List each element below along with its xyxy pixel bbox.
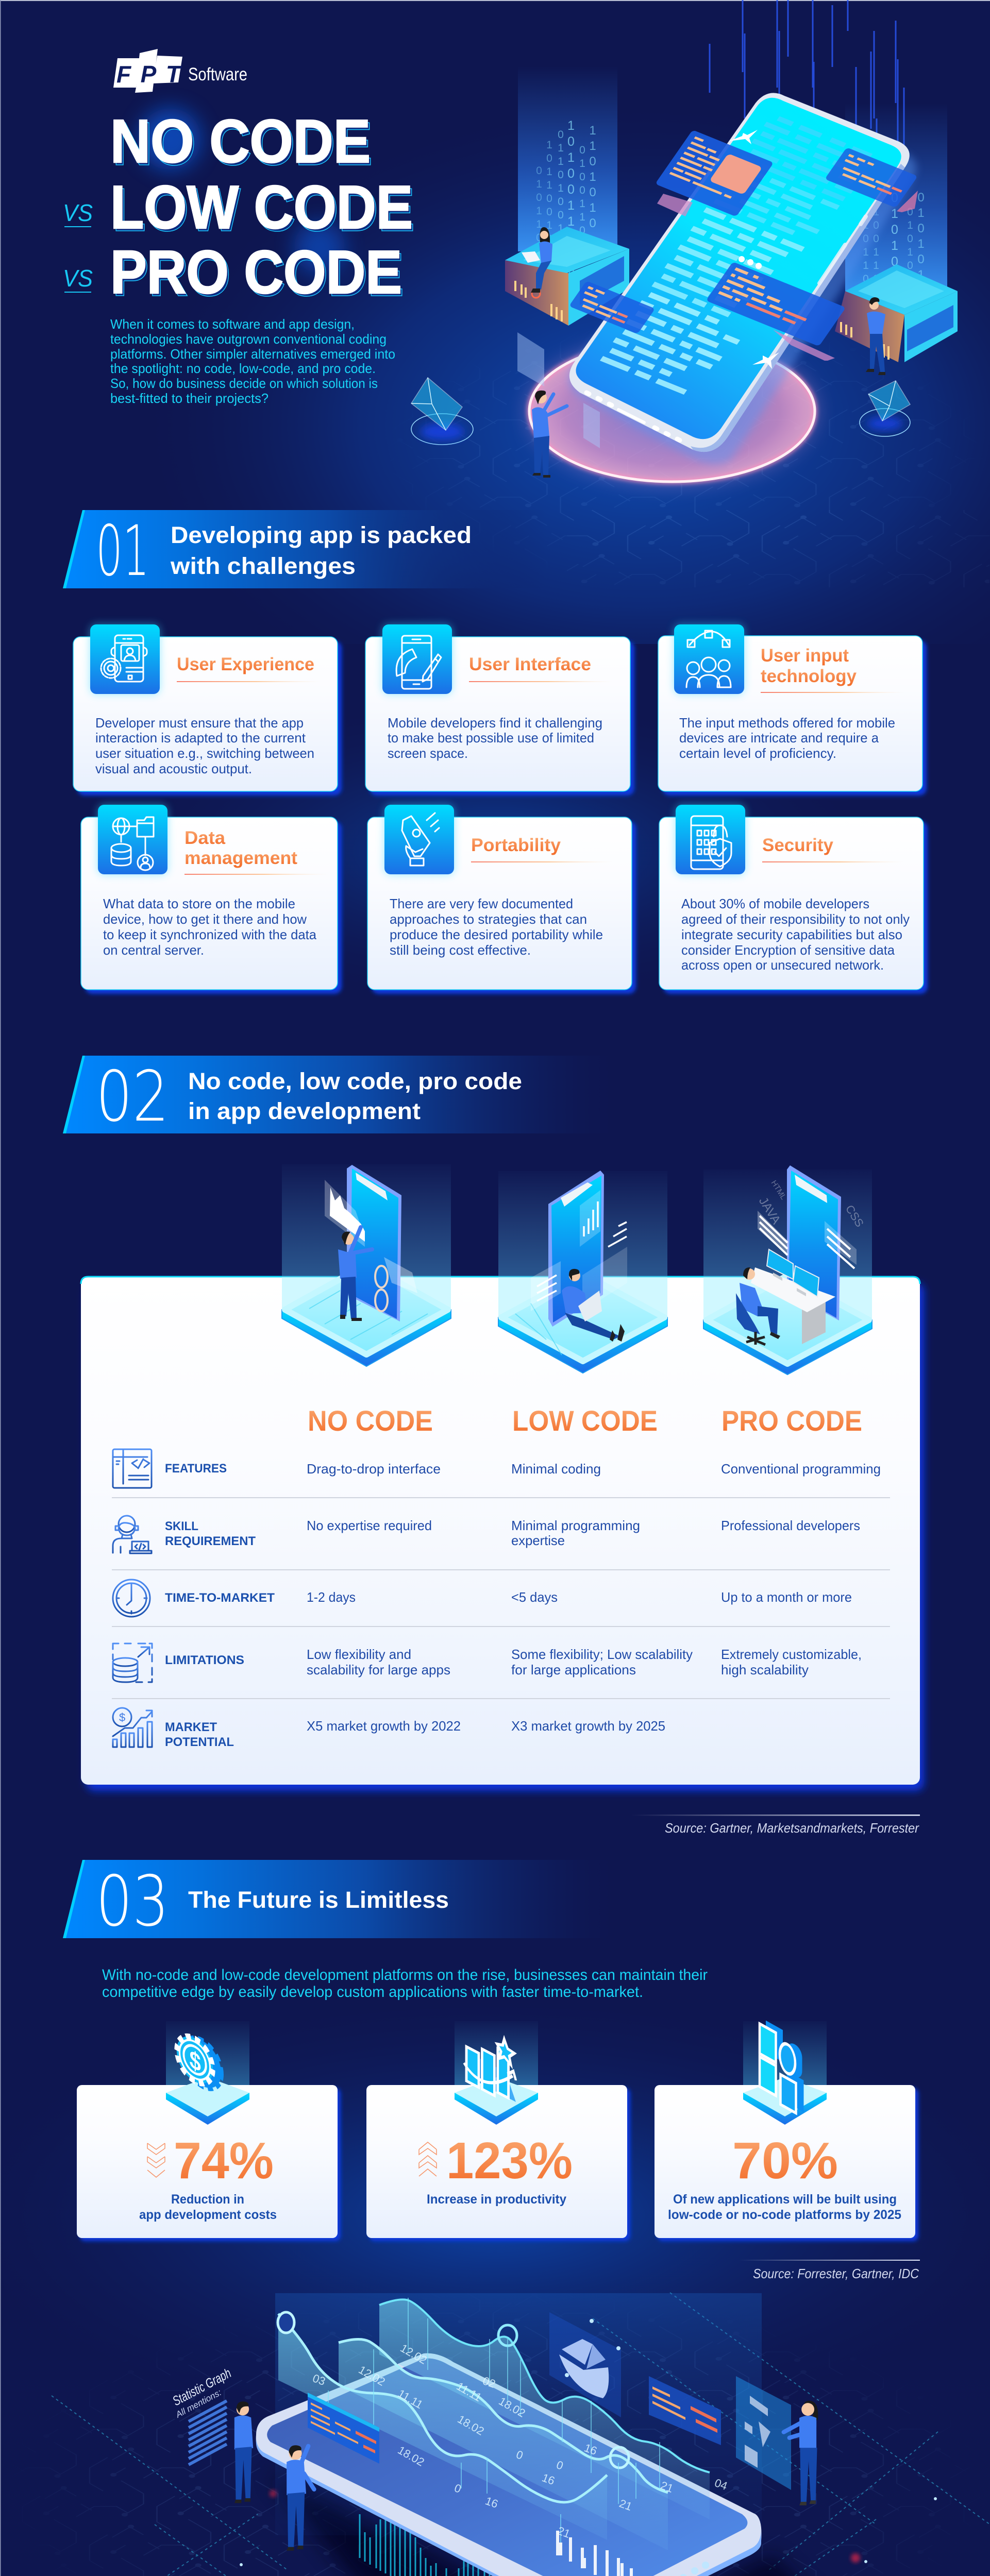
chart axis labels: 16 [582, 2441, 599, 2458]
body text: agreed of their responsibility to not only [681, 911, 910, 927]
heading 01: Developing app is packed [171, 522, 472, 548]
row: skill requirement [113, 1516, 860, 1553]
title: technology [761, 666, 857, 686]
hero illustration: giant phone with code [381, 0, 990, 587]
stat label [139, 2192, 277, 2222]
heading line: NO CODE: NO CODE [112, 110, 373, 178]
chart axis labels: 11.11 [396, 2387, 425, 2411]
label: SKILL [165, 1519, 198, 1533]
pie chart panel [549, 2312, 621, 2417]
body text: consider Encryption of sensitive data [681, 942, 895, 958]
body text: Developer must ensure that the app [95, 715, 304, 731]
body text: across open or unsecured network. [681, 957, 884, 973]
label: vs: VS [63, 199, 93, 226]
glowing ring platform [529, 340, 815, 482]
binary digits: left: 1101010 [585, 124, 600, 232]
icon: developer with laptop [113, 1516, 152, 1553]
stat card: 70 percent [655, 2017, 918, 2241]
values: Extremely customizable, [721, 1647, 862, 1662]
chart axis labels: 18.02 [456, 2413, 486, 2438]
icon: keypad phone with shield [691, 816, 731, 869]
chart axis labels: 18.02 [497, 2395, 528, 2420]
values: X3 market growth by 2025 [511, 1718, 665, 1734]
section header 02 [63, 1056, 613, 1137]
phone base [256, 2353, 762, 2576]
values: Up to a month or more [721, 1589, 852, 1605]
binary digits: right: 010101 [914, 191, 928, 283]
label: MARKET [165, 1720, 217, 1734]
body text: interaction is adapted to the current [95, 730, 306, 745]
heading 02: No code, low code, pro code [188, 1068, 522, 1094]
title: Security [762, 835, 834, 855]
brand logo: FPT Software: Software [188, 64, 247, 84]
heading 02: in app development [188, 1098, 421, 1124]
row: time to market [113, 1580, 852, 1617]
intro paragraph: platforms. Other simpler alternatives emerged into [110, 346, 395, 362]
heading 03: The Future is Limitless [188, 1887, 449, 1913]
body text: visual and acoustic output. [95, 761, 252, 776]
language labels: CSS [843, 1202, 866, 1229]
heading line: NO CODE: NO CODE [110, 107, 371, 176]
cube: right [860, 381, 910, 436]
code panel: top right [825, 147, 918, 208]
body text: to keep it synchronized with the data [103, 927, 317, 942]
values [307, 1647, 862, 1677]
statistic graph label: All mentions: [174, 2387, 223, 2420]
chart axis labels: 18.02 [396, 2444, 427, 2469]
holo pages [517, 332, 600, 448]
icon: code window [113, 1449, 152, 1488]
person: programmer in chair [736, 1267, 780, 1345]
code panel: right [649, 2376, 721, 2445]
illustration: pro code platform [703, 1165, 872, 1375]
light beam: right [845, 103, 947, 294]
heading line: LOW CODE: LOW CODE [110, 173, 413, 242]
source note: section 3: Source: Forrester, Gartner, IDC [753, 2266, 919, 2281]
body text [679, 715, 895, 761]
body text: The input methods offered for mobile [679, 715, 895, 731]
binary digits: left: 01001101 [576, 144, 589, 251]
person: man pointing up [287, 2445, 314, 2551]
chart axis labels: 02 [481, 2374, 497, 2391]
phone home button [618, 410, 644, 422]
chart axis labels: 21 [556, 2524, 572, 2540]
person: pushing at phone [338, 1227, 372, 1321]
values: Some flexibility; Low scalability [511, 1647, 693, 1662]
label: LIMITATIONS [165, 1653, 244, 1667]
title: User input [761, 646, 849, 666]
values: Low flexibility and [307, 1647, 411, 1662]
values [307, 1718, 665, 1734]
icon: phone with gear [101, 635, 147, 682]
stat value: 70% [732, 2132, 838, 2190]
stat value: 74% [174, 2132, 274, 2190]
body text: produce the desired portability while [390, 927, 603, 942]
light beam: left [518, 66, 617, 251]
language labels [756, 1179, 866, 1229]
icon: hand holding phone with signal [402, 813, 439, 866]
card: portability [367, 805, 636, 994]
language labels: JAVA [756, 1195, 783, 1227]
body text [95, 715, 314, 776]
illustration: analytics phone with charts [0, 2287, 990, 2576]
heading line: PRO CODE: PRO CODE [112, 241, 404, 309]
chart axis labels: 03 [311, 2371, 327, 2388]
icon: globe, folder, database, user [111, 817, 154, 870]
body text [681, 896, 910, 973]
chart axis labels: 04 [713, 2476, 729, 2493]
values: Drag-to-drop interface [307, 1461, 441, 1477]
row: features [113, 1449, 881, 1488]
intro paragraph [110, 316, 395, 406]
body text: on central server. [103, 942, 204, 958]
chart axis labels: 12.02 [398, 2342, 429, 2367]
body text: screen space. [388, 745, 468, 761]
illustration: low code platform [498, 1171, 667, 1373]
row: limitations [113, 1643, 862, 1682]
circuit floor [461, 379, 915, 551]
chart axis labels: 0 [555, 2458, 565, 2472]
chart axis labels: 21 [617, 2497, 634, 2513]
body text [103, 896, 317, 958]
code panel: lower left [569, 281, 655, 334]
binary digits: left: 1010011010 [564, 118, 578, 278]
stat label: low-code or no-code platforms by 2025 [668, 2208, 901, 2222]
stat label: Increase in productivity [427, 2192, 566, 2207]
values: X5 market growth by 2022 [307, 1718, 461, 1734]
binary digits: left [533, 118, 600, 278]
panel: comparison table [81, 1164, 924, 1791]
binary digits: left: 011010010 [555, 129, 567, 249]
intro paragraph: When it comes to software and app design, [110, 316, 355, 332]
circuit background [74, 2330, 913, 2576]
body text: integrate security capabilities but also [681, 927, 902, 942]
flow chart panel [736, 2376, 791, 2490]
body text: What data to store on the mobile [103, 896, 295, 911]
values: Professional developers [721, 1518, 860, 1533]
label [165, 1519, 256, 1548]
card: user experience [73, 624, 342, 795]
values: 1-2 days [307, 1589, 356, 1605]
label: POTENTIAL [165, 1735, 234, 1749]
values: scalability for large apps [307, 1662, 450, 1677]
section 3 intro text [102, 1967, 708, 2001]
chart axis labels [311, 2342, 729, 2540]
source note: section 2: Source: Gartner, Marketsandmarkets, Forrester [665, 1820, 919, 1836]
title [184, 828, 329, 875]
values: expertise [511, 1533, 565, 1548]
number 03: 03 [96, 1861, 169, 1942]
body text: About 30% of mobile developers [681, 896, 869, 911]
person: man pointing at phone [532, 391, 567, 478]
body text: to make best possible use of limited [388, 730, 594, 745]
body text: certain level of proficiency. [679, 745, 836, 761]
label: vs second: VS [63, 265, 93, 292]
body text: approaches to strategies that can [390, 911, 587, 927]
card: user input technology [658, 624, 927, 795]
card: user interface [365, 624, 634, 795]
floating pink slabs [657, 191, 918, 361]
person: man with hand on chin [234, 2401, 253, 2503]
home dots [670, 2565, 706, 2576]
sparkle [729, 130, 779, 369]
values: high scalability [721, 1662, 809, 1677]
data streaks [710, 0, 904, 165]
number 01: 01 [96, 511, 149, 591]
binary digits: left: 0101100 [533, 165, 545, 259]
values: Minimal programming [511, 1518, 640, 1533]
person: man thinking at right block [866, 297, 885, 375]
values: for large applications [511, 1662, 636, 1677]
section 3 intro text: With no-code and low-code development platforms on the rise, businesses can maintain their [102, 1967, 708, 1984]
code lines on screen [600, 113, 880, 404]
title: no code vs low code vs pro code [63, 107, 415, 309]
intro paragraph: best-fitted to their projects? [110, 391, 269, 406]
stat card: 74 percent [77, 2021, 341, 2241]
row: market potential [113, 1708, 665, 1749]
stat label: Of new applications will be built using [673, 2192, 897, 2207]
values [307, 1461, 881, 1477]
heading line: PRO CODE: PRO CODE [110, 238, 402, 307]
sparkles [195, 2319, 937, 2576]
section header 03 [63, 1860, 613, 1942]
column heading: low code: LOW CODE [512, 1404, 658, 1437]
card: data management [81, 805, 342, 994]
intro paragraph: technologies have outgrown conventional coding [110, 331, 387, 347]
chart axis labels: 11.11 [455, 2380, 484, 2404]
number 02: 02 [96, 1056, 169, 1137]
body text: Mobile developers find it challenging [388, 715, 602, 731]
binary digits: right: 0101100 [860, 206, 872, 300]
section 1 circuit backdrop [567, 510, 989, 587]
chart axis labels: 16 [540, 2471, 557, 2487]
brand logo: FPT Software [113, 49, 247, 93]
stat card: 123 percent [366, 2018, 630, 2241]
binary digits: right: 100110 [870, 206, 882, 286]
icon: people with checkboxes [686, 631, 731, 687]
column heading: no code: NO CODE [308, 1404, 433, 1437]
icon: clock [113, 1580, 150, 1617]
column heading: pro code: PRO CODE [721, 1404, 862, 1437]
hanging data bars [360, 2512, 498, 2576]
icon: growth chart: $ [119, 1711, 125, 1724]
icon: gear with dollar [177, 2027, 221, 2096]
icon: rising bars with star [464, 2018, 516, 2107]
icon: double down chevrons [147, 2143, 165, 2177]
window dots [742, 259, 759, 266]
binary digits: right: 0101011 [887, 191, 902, 302]
values: No expertise required [307, 1518, 432, 1533]
title: User Interface [469, 654, 591, 674]
values [307, 1518, 860, 1548]
language labels: HTML [769, 1179, 788, 1201]
chart axis labels: 16 [483, 2494, 500, 2511]
shadow under phone [268, 2473, 825, 2576]
back light panel [275, 2293, 762, 2535]
chart axis labels: 0 [452, 2481, 463, 2496]
icon: app blocks [760, 2017, 804, 2117]
code panel: center [706, 262, 846, 346]
heading 01: with challenges [170, 553, 356, 579]
intro paragraph: the spotlight: no code, low-code, and pro code. [110, 361, 376, 376]
title: management [184, 848, 297, 868]
chart axis labels: 12.02 [357, 2363, 388, 2388]
brand logo: FPT Software: FPT [116, 61, 182, 88]
values: Conventional programming [721, 1461, 881, 1477]
heading line: LOW CODE: LOW CODE [112, 176, 415, 244]
title [761, 646, 905, 693]
icon: scaling database [113, 1643, 152, 1682]
label: REQUIREMENT [165, 1534, 256, 1548]
section header 01 [63, 510, 546, 591]
stat value: 123% [446, 2132, 573, 2190]
label [165, 1720, 234, 1749]
heading 01 [170, 522, 472, 579]
heading 02 [188, 1068, 522, 1124]
phone body and screen [569, 93, 916, 464]
card: security [659, 805, 928, 994]
icon: gear with dollar: $ [190, 2044, 201, 2078]
body text: user situation e.g., switching between [95, 745, 314, 761]
binary digits: left: 10110010 [543, 139, 556, 246]
chart panel [278, 2298, 729, 2550]
icon: growth chart [113, 1708, 152, 1747]
body text: device, how to get it there and how [103, 911, 307, 927]
title: Portability [471, 835, 561, 855]
stat label: app development costs [139, 2208, 277, 2222]
binary digits: right [860, 191, 928, 302]
statistic graph label [170, 2365, 233, 2465]
server block: right [835, 264, 958, 362]
chart axis labels: 0 [514, 2448, 525, 2462]
values [307, 1589, 852, 1605]
person: woman with laptop [522, 227, 552, 293]
label: TIME-TO-MARKET [165, 1591, 275, 1605]
person: sitting with laptop [562, 1269, 625, 1342]
server block: left [505, 227, 629, 326]
binary digits: right: 01010 [904, 206, 916, 273]
values: Minimal coding [511, 1461, 601, 1477]
body text: devices are intricate and require a [679, 730, 879, 745]
body text: There are very few documented [390, 896, 573, 911]
icon: double up chevrons [419, 2142, 437, 2176]
values: <5 days [511, 1589, 558, 1605]
stat label: Reduction in [171, 2192, 244, 2207]
icon: phone with protractor and pencil [396, 636, 441, 689]
chart axis labels: 21 [659, 2479, 675, 2495]
body text: still being cost effective. [390, 942, 531, 958]
title: User Experience [177, 654, 314, 674]
intro paragraph: So, how do business decide on which solution is [110, 376, 378, 391]
code panel: top left [655, 130, 774, 217]
cube: left [411, 378, 473, 445]
dashed traces [52, 2293, 990, 2576]
stat label [668, 2192, 901, 2222]
statistic graph label: Statistic Graph [170, 2365, 233, 2409]
section 3 intro text: competitive edge by easily develop custom applications with faster time-to-market. [102, 1984, 643, 2001]
title: Data [184, 828, 226, 848]
label: FEATURES [165, 1462, 227, 1476]
code panel: left [308, 2393, 379, 2464]
white bars on phone [558, 2531, 631, 2576]
illustration: no code platform [282, 1164, 451, 1366]
body text [390, 896, 603, 958]
body text [388, 715, 602, 761]
person: woman at flow chart [784, 2401, 818, 2505]
desk with monitors [751, 1249, 835, 1344]
